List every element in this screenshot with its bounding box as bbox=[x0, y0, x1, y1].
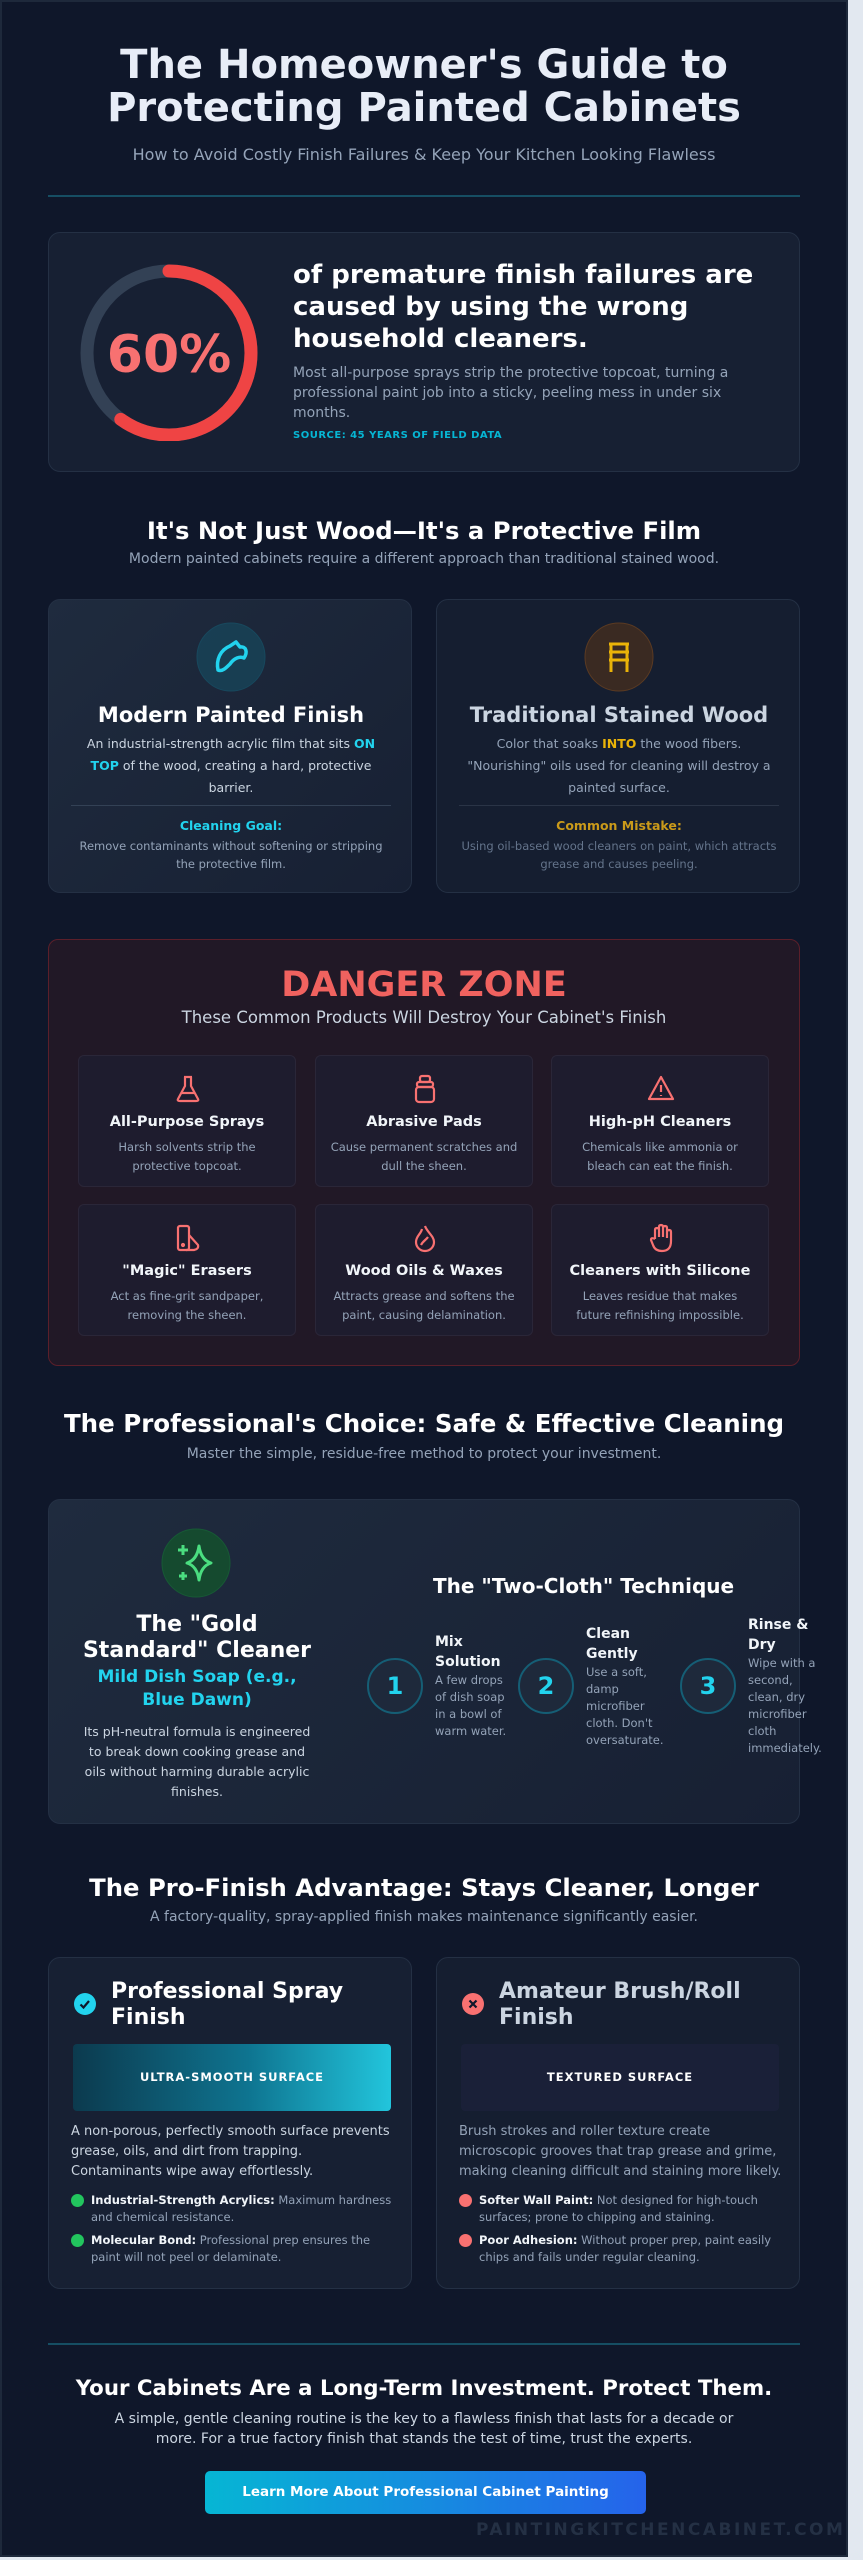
mild dish soap: Mild Dish Soap (e.g., bbox=[97, 1667, 297, 1687]
source: SOURCE: 45 YEARS OF FIELD DATA bbox=[293, 430, 502, 441]
gold standard title bbox=[83, 1612, 311, 1663]
cell: all-purpose sprays: All-Purpose Sprays bbox=[110, 1114, 264, 1130]
heading: protective film: It's Not Just Wood—It's a Protective Film bbox=[147, 516, 701, 545]
desc: An industrial-strength acrylic film that sits ON TOP of the wood, creating a hard, protective barrier. bbox=[87, 736, 375, 795]
step 3: 3 bbox=[700, 1672, 716, 1700]
cell: abrasive pads: Cause permanent scratches and dull the sheen. bbox=[331, 1140, 517, 1173]
panel: amateur brush: Amateur Brush/Roll Finish bbox=[499, 1979, 741, 2030]
title: Professional Spray Finish bbox=[111, 1979, 343, 2030]
heading: pro-finish advantage: The Pro-Finish Advantage: Stays Cleaner, Longer bbox=[89, 1873, 759, 1902]
cell: high-pH: High-pH Cleaners bbox=[589, 1114, 731, 1130]
desc: A non-porous, perfectly smooth surface prevents grease, oils, and dirt from trapping. Contaminants wipe away effortlessly. bbox=[71, 2124, 390, 2179]
title bbox=[107, 42, 741, 131]
panel: cleaning bbox=[48, 1499, 800, 1824]
cell: high-pH: Chemicals like ammonia or bleach can eat the finish. bbox=[582, 1140, 738, 1173]
danger title: DANGER ZONE bbox=[281, 965, 567, 1005]
step 2 bbox=[518, 1626, 664, 1746]
cell: all-purpose sprays bbox=[78, 1055, 296, 1187]
gold standard title: Standard" Cleaner bbox=[83, 1638, 311, 1663]
text: Master the simple, residue-free method to protect your investment. bbox=[187, 1446, 661, 1462]
icon: x bbox=[462, 1993, 484, 2015]
panel: amateur brush bbox=[436, 1957, 800, 2289]
cell: abrasive pads bbox=[315, 1055, 533, 1187]
bullet 2: Poor Adhesion: Without proper prep, paint easily chips and fails under regular cleaning. bbox=[479, 2233, 771, 2264]
panel: professional spray bbox=[48, 1957, 412, 2289]
icon: check bbox=[74, 1993, 96, 2015]
icon: shield wave bbox=[196, 622, 266, 692]
panel: modern painted bbox=[48, 599, 412, 893]
step 1: 1 bbox=[387, 1672, 403, 1700]
cell: magic erasers: Act as fine-grit sandpaper, removing the sheen. bbox=[111, 1289, 263, 1322]
bullet 2: Molecular Bond: Professional prep ensures the paint will not peel or delaminate. bbox=[91, 2233, 370, 2264]
surface bar bbox=[73, 2044, 391, 2111]
gold standard title: The "Gold bbox=[136, 1612, 258, 1637]
step 3: Wipe with a second, clean, dry microfiber cloth immediately. bbox=[748, 1656, 822, 1755]
step 2: Clean Gently bbox=[586, 1626, 638, 1662]
two-cloth heading: The "Two-Cloth" Technique bbox=[433, 1574, 734, 1598]
panel: amateur brush: Brush strokes and roller texture create microscopic grooves that trap grease and grime, making cleaning difficult and staining more likely. bbox=[459, 2124, 781, 2179]
common mistake: Using oil-based wood cleaners on paint, which attracts grease and causes peeling. bbox=[461, 839, 777, 871]
cell: high-pH bbox=[551, 1055, 769, 1187]
card title: Traditional Stained Wood bbox=[470, 703, 768, 727]
panel: traditional stained bbox=[436, 599, 800, 893]
cell: abrasive pads: Abrasive Pads bbox=[366, 1114, 482, 1130]
cleaning goal: Cleaning Goal: bbox=[180, 818, 282, 833]
step 1: Mix Solution bbox=[435, 1634, 501, 1670]
cell: silicone: future refinishing impossible. bbox=[576, 1308, 744, 1322]
step 1: A few drops of dish soap in a bowl of warm water. bbox=[435, 1673, 506, 1738]
icon: wood fence bbox=[584, 622, 654, 692]
heading: professional choice: The Professional's Choice: Safe & Effective Cleaning bbox=[64, 1409, 784, 1438]
surface bar: ULTRA-SMOOTH SURFACE bbox=[140, 2070, 324, 2084]
footer heading: Your Cabinets Are a Long-Term Investment. Protect Them. bbox=[76, 2376, 772, 2401]
button bbox=[205, 2471, 646, 2514]
cell: wood oils: Wood Oils & Waxes bbox=[345, 1263, 503, 1279]
panel: traditional stained: Color that soaks INTO the wood fibers. "Nourishing" oils used for cleaning will destroy a painted surface. bbox=[467, 736, 771, 795]
panel: danger zone: These Common Products Will Destroy Your Cabinet's Finish bbox=[182, 1008, 666, 1027]
panel: danger zone bbox=[48, 939, 800, 1366]
title: The Homeowner's Guide to bbox=[120, 42, 728, 88]
mild dish soap bbox=[97, 1667, 297, 1710]
mild dish soap: Blue Dawn) bbox=[142, 1690, 252, 1710]
step 1 bbox=[367, 1634, 506, 1738]
panel: stat bbox=[48, 232, 800, 472]
title: Protecting Painted Cabinets bbox=[107, 85, 741, 131]
surface bar: TEXTURED SURFACE bbox=[547, 2070, 693, 2084]
chart: 60% ring: 60% bbox=[107, 325, 231, 385]
text: Modern painted cabinets require a different approach than traditional stained wood. bbox=[129, 551, 719, 567]
cell: silicone: Leaves residue that makes bbox=[583, 1289, 737, 1303]
text: A factory-quality, spray-applied finish makes maintenance significantly easier. bbox=[150, 1909, 698, 1925]
cell: all-purpose sprays: Harsh solvents strip the protective topcoat. bbox=[118, 1140, 256, 1173]
common mistake bbox=[461, 818, 777, 871]
bullet 1: Industrial-Strength Acrylics: Maximum hardness and chemical resistance. bbox=[91, 2193, 391, 2224]
watermark: PAINTINGKITCHENCABINET.COM bbox=[476, 2520, 845, 2540]
button: Learn More About Professional Cabinet Painting bbox=[242, 2484, 609, 2500]
cell: magic erasers: "Magic" Erasers bbox=[122, 1263, 252, 1279]
stat headline: of premature finish failures are caused by using the wrong household cleaners. bbox=[293, 260, 753, 354]
card title: Modern Painted Finish bbox=[98, 703, 364, 727]
cell: silicone bbox=[551, 1204, 769, 1336]
cleaning goal: Remove contaminants without softening or stripping the protective film. bbox=[79, 839, 382, 871]
cleaner desc: Its pH-neutral formula is engineered to break down cooking grease and oils without harming durable acrylic finishes. bbox=[84, 1724, 310, 1799]
cell: magic erasers bbox=[78, 1204, 296, 1336]
step 3: Rinse & Dry bbox=[748, 1617, 808, 1653]
cell: silicone: Cleaners with Silicone bbox=[570, 1263, 750, 1279]
cleaning goal bbox=[79, 818, 382, 871]
icon: sparkle bbox=[162, 1528, 230, 1598]
surface bar bbox=[461, 2044, 779, 2111]
subtitle: How to Avoid Costly Finish Failures & Keep Your Kitchen Looking Flawless bbox=[133, 145, 715, 164]
step 3 bbox=[680, 1617, 822, 1755]
stat body: Most all-purpose sprays strip the protective topcoat, turning a professional paint job into a sticky, peeling mess in under six months. bbox=[293, 365, 728, 421]
common mistake: Common Mistake: bbox=[556, 818, 682, 833]
bullet 1: Softer Wall Paint: Not designed for high-touch surfaces; prone to chipping and staining. bbox=[479, 2193, 758, 2224]
cell: wood oils: Attracts grease and softens the paint, causing delamination. bbox=[333, 1289, 515, 1322]
step 2: 2 bbox=[538, 1672, 554, 1700]
chart: 60% ring bbox=[80, 264, 258, 441]
cell: wood oils bbox=[315, 1204, 533, 1336]
footer text: A simple, gentle cleaning routine is the key to a flawless finish that lasts for a decade or more. For a true factory finish that stands the test of time, trust the experts. bbox=[115, 2411, 733, 2447]
step 2: Use a soft, damp microfiber cloth. Don't oversaturate. bbox=[586, 1664, 664, 1746]
